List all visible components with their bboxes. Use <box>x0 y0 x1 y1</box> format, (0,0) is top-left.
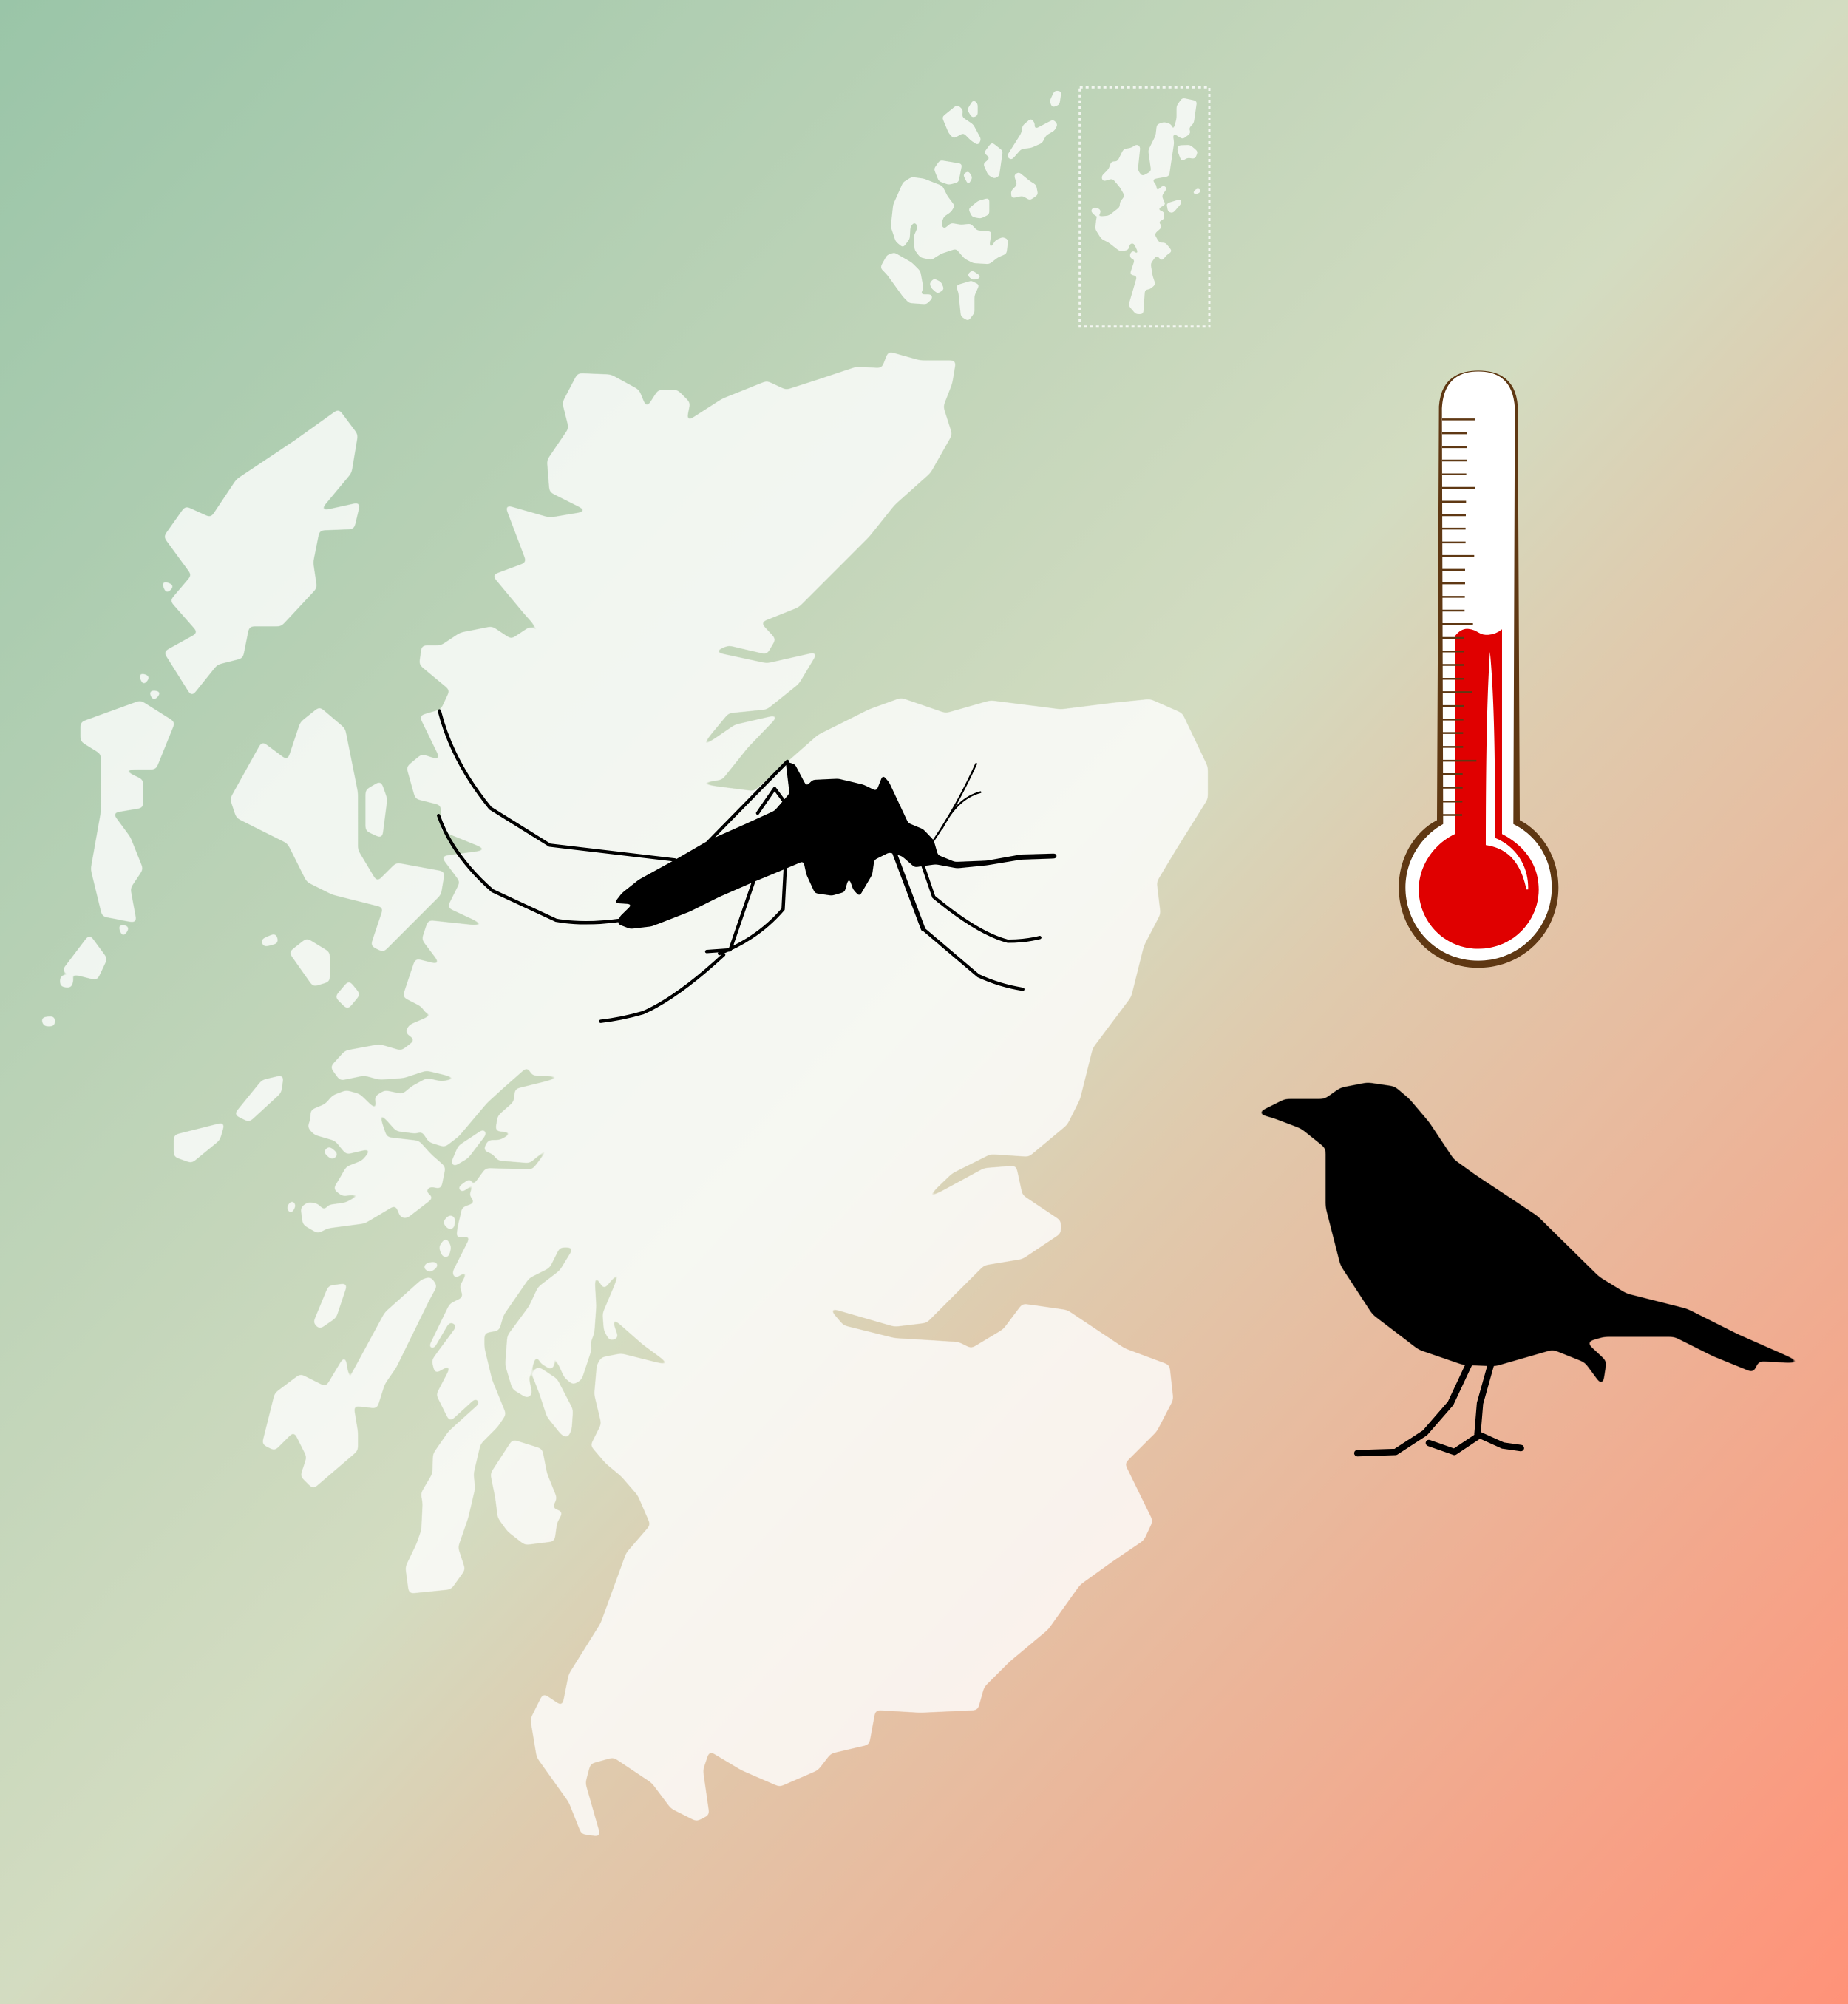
thermometer mercury <box>1419 629 1539 949</box>
thermometer scale ticks <box>1442 419 1476 815</box>
icon: bird silhouette <box>1257 1082 1804 1453</box>
thermometer glass <box>1405 371 1552 961</box>
dotted inset box <box>1080 87 1209 327</box>
mainland <box>330 351 1208 1837</box>
tiny islets <box>41 580 175 1026</box>
Barra <box>61 934 107 980</box>
Arran <box>490 1439 563 1545</box>
Mull <box>301 1090 446 1233</box>
Coll and Tiree <box>234 1075 284 1122</box>
Bute <box>532 1366 573 1438</box>
Skye <box>230 707 445 952</box>
Jura <box>351 1277 437 1408</box>
Orkney islands <box>881 91 1061 321</box>
map: Orkney and Shetland <box>881 87 1209 327</box>
Shetland islands <box>1090 98 1201 314</box>
small isles <box>289 938 330 987</box>
Colonsay <box>313 1283 347 1329</box>
Raasay <box>365 781 387 838</box>
thermometer highlight <box>1486 652 1528 889</box>
Islay <box>262 1355 358 1489</box>
Uists <box>81 700 175 923</box>
icon: thermometer <box>1399 370 1558 968</box>
Lewis and Harris <box>163 409 361 696</box>
bird body <box>1257 1082 1804 1387</box>
mosquito body <box>614 761 1057 929</box>
thermometer outline <box>1399 370 1558 968</box>
bird legs <box>1357 1362 1521 1453</box>
mosquito legs <box>438 711 1040 1022</box>
icon: mosquito <box>438 711 1057 1022</box>
map: Scotland mainland and western isles <box>41 351 1208 1837</box>
Lismore and Firth of Lorn islets <box>286 1129 486 1273</box>
